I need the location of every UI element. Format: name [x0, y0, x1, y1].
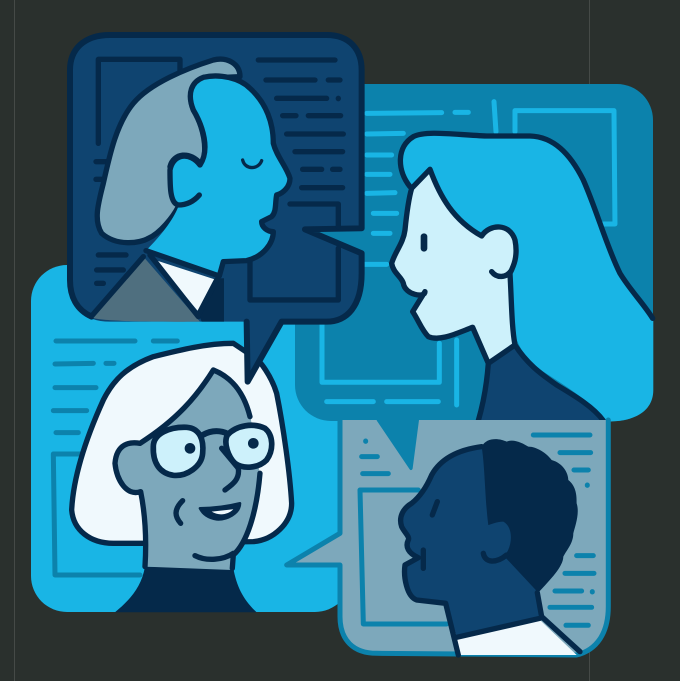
shirt — [457, 620, 577, 655]
panel: right teal card — [295, 84, 653, 468]
dark card outline and tail — [70, 35, 362, 382]
outlines — [392, 133, 653, 421]
person: woman with white hair and glasses — [72, 343, 292, 612]
head — [401, 447, 542, 637]
outlines — [401, 447, 580, 655]
dark card text lines — [96, 59, 343, 300]
face outlines — [115, 370, 260, 568]
man: tie shadow — [198, 278, 224, 322]
left card text lines — [53, 341, 177, 575]
bottom card text lines — [360, 435, 594, 625]
man: face — [147, 76, 290, 275]
right card tail overlap — [378, 420, 417, 468]
man: hair — [97, 59, 240, 243]
hair — [400, 133, 653, 422]
sweater — [478, 345, 603, 422]
right card text lines — [322, 102, 615, 405]
face — [392, 169, 516, 363]
mouth — [200, 503, 240, 519]
panel: left light blue card — [31, 265, 351, 612]
glasses — [153, 425, 272, 475]
man: closed eye — [243, 160, 262, 168]
person: woman with long hair — [392, 133, 653, 422]
face — [115, 370, 260, 570]
hair — [480, 439, 578, 593]
eye — [432, 502, 437, 515]
panel: bottom grey-blue card — [287, 420, 608, 655]
panel: top-left dark blue card with man — [70, 35, 362, 382]
hair — [72, 343, 292, 543]
man: shirt — [155, 260, 217, 312]
right card tail — [378, 420, 417, 468]
eye — [414, 237, 434, 248]
turtleneck — [115, 567, 257, 612]
person: man with short curly hair — [401, 439, 580, 655]
man: suit — [92, 257, 200, 322]
man: outlines — [92, 76, 290, 317]
